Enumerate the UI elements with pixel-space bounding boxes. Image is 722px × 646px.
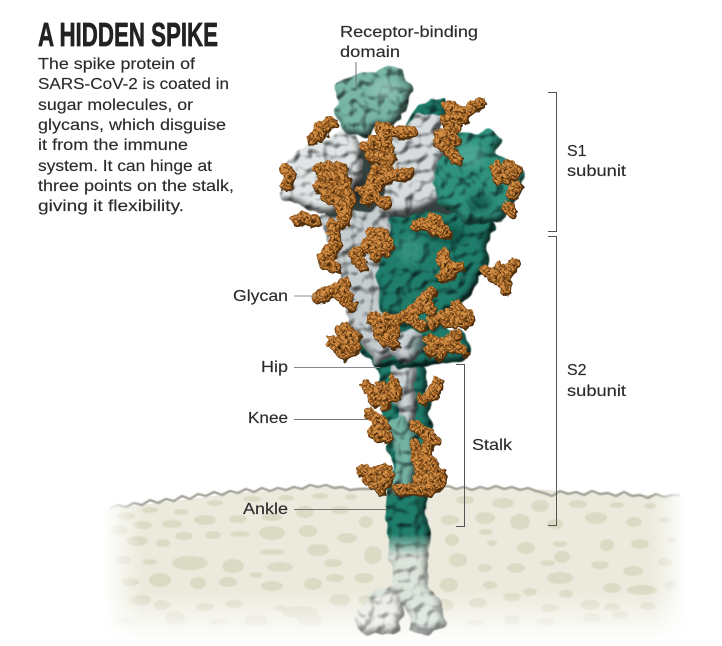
label: receptor-binding domain: Receptor-binding xyxy=(340,24,478,41)
bracket: S2 subunit: S2 xyxy=(567,362,587,379)
spike protein xyxy=(281,68,526,562)
domain: receptor-binding domain xyxy=(337,68,413,140)
stalk xyxy=(378,352,434,562)
intro text: SARS-CoV-2 is coated in xyxy=(38,76,229,93)
domain: dark inner core xyxy=(325,130,485,340)
domain: gray lower left xyxy=(316,206,398,364)
bracket: S1 subunit: S1 xyxy=(567,143,587,160)
label: hip xyxy=(261,359,380,376)
label: hip: Hip xyxy=(261,359,288,376)
label: ankle: Ankle xyxy=(243,501,288,518)
glycan bead highlights xyxy=(283,100,514,488)
glycan shadow layer xyxy=(286,104,517,492)
membrane edge fades xyxy=(90,485,700,645)
intro text: it from the immune xyxy=(38,137,188,154)
label: knee: Knee xyxy=(248,410,288,427)
glycan beads xyxy=(285,102,516,490)
intro text: system. It can hinge at xyxy=(38,158,213,175)
membrane cells xyxy=(108,493,679,627)
domain: gray upper centre xyxy=(378,115,444,214)
membrane edge line xyxy=(110,485,680,508)
domain: bright teal right lobe xyxy=(434,128,526,223)
domain: lower teal base xyxy=(352,322,470,367)
bracket: S1 subunit xyxy=(548,92,627,232)
glycans xyxy=(283,100,518,492)
bracket: S2 subunit: subunit xyxy=(567,383,627,400)
membrane surface xyxy=(100,487,692,640)
bracket: stalk xyxy=(456,364,513,526)
label: receptor-binding domain xyxy=(340,24,478,86)
bracket: S2 subunit xyxy=(548,236,627,526)
label: receptor-binding domain: domain xyxy=(340,44,400,61)
label: knee xyxy=(248,410,368,427)
domain: lower gray bit xyxy=(390,330,428,364)
title: A HIDDEN SPIKE xyxy=(38,16,218,53)
cell membrane xyxy=(90,485,700,645)
intro text: giving it flexibility. xyxy=(38,198,184,215)
domain: upper dark teal top xyxy=(403,98,448,138)
label: glycan: Glycan xyxy=(233,288,288,305)
surface shading xyxy=(346,80,492,352)
bracket: stalk: Stalk xyxy=(472,437,513,454)
domain: gray left lobe xyxy=(281,132,364,216)
label: glycan xyxy=(233,288,316,305)
glycan dark speckles xyxy=(288,104,518,492)
intro text: The spike protein of xyxy=(38,56,196,73)
intro text: glycans, which disguise xyxy=(38,117,226,134)
intro text: three points on the stalk, xyxy=(38,178,234,195)
lower stalk inside membrane, faded xyxy=(356,540,450,634)
intro text xyxy=(38,56,234,215)
main body of spike xyxy=(281,68,526,367)
intro text: sugar molecules, or xyxy=(38,97,194,114)
domain: dark teal centre xyxy=(378,213,492,332)
bracket: S1 subunit: subunit xyxy=(567,163,627,180)
